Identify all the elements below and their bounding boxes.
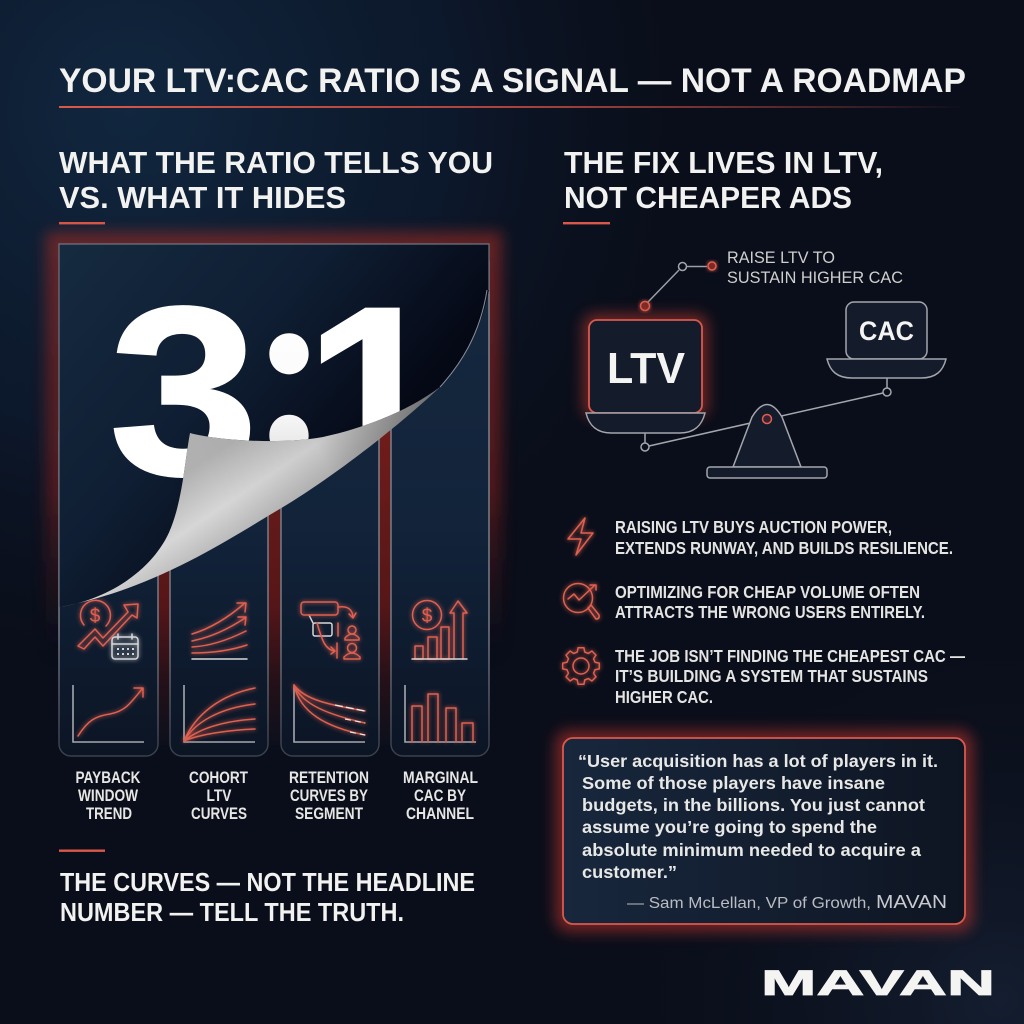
- icon: cohort rising lines: [192, 603, 247, 659]
- bullet 3: THE JOB ISN’T FINDING THE CHEAPEST CAC —: [615, 646, 965, 666]
- label: payback window trend: TREND: [86, 805, 132, 823]
- quote box: “User acquisition has a lot of players in it.: [578, 751, 938, 771]
- quote box: [555, 730, 973, 932]
- chart: retention curves by segment: [294, 685, 365, 742]
- quote box: Some of those players have insane: [582, 773, 885, 793]
- chart: marginal CAC by channel: [405, 685, 476, 742]
- label: cohort LTV curves: LTV: [206, 787, 232, 805]
- label: payback window trend: PAYBACK: [76, 769, 141, 787]
- bullet 1: [568, 517, 953, 558]
- label: retention curves by segment: [289, 769, 369, 823]
- bullet 3: [563, 646, 965, 707]
- icon: payback dollar and trend with calendar: [78, 600, 138, 659]
- icon: magnifier with trend: [564, 584, 599, 619]
- quote box: budgets, in the billions. You just cannot: [582, 795, 925, 815]
- bullet 3: HIGHER CAC.: [615, 687, 713, 707]
- icon: dollar, bars and up arrow: $: [422, 606, 433, 627]
- bullet 3: IT’S BUILDING A SYSTEM THAT SUSTAINS: [615, 666, 928, 686]
- bullet 1: RAISING LTV BUYS AUCTION POWER,: [615, 517, 892, 537]
- takeaway text: NUMBER — TELL THE TRUTH.: [60, 897, 404, 927]
- icon: dollar, bars and up arrow: [412, 600, 467, 659]
- chart: payback window trend: [73, 685, 144, 742]
- bullet 2: ATTRACTS THE WRONG USERS ENTIRELY.: [615, 602, 925, 622]
- fulcrum: [707, 404, 827, 478]
- bullet 2: [564, 582, 925, 622]
- CAC box: [846, 302, 927, 359]
- chart: cohort LTV curves: [184, 685, 255, 742]
- big number 3:1: 1: [305, 257, 445, 526]
- logo: MAVAN: [761, 964, 995, 1003]
- quote box: — Sam McLellan, VP of Growth,: [627, 895, 871, 912]
- label: cohort LTV curves: COHORT: [189, 769, 248, 787]
- takeaway text: [59, 850, 475, 927]
- title: YOUR LTV:CAC RATIO IS A SIGNAL — NOT A ROADMAP: [59, 62, 966, 100]
- bullet 2: OPTIMIZING FOR CHEAP VOLUME OFTEN: [615, 582, 920, 602]
- callout connector: [640, 262, 716, 310]
- heading: left column: [59, 145, 493, 224]
- label: retention curves by segment: SEGMENT: [295, 805, 363, 823]
- big number 3:1: 3: [109, 256, 259, 525]
- callout text: RAISE LTV TO: [727, 248, 835, 267]
- page curl: [60, 290, 487, 607]
- beam: [641, 378, 891, 451]
- bullet 1: EXTENDS RUNWAY, AND BUILDS RESILIENCE.: [615, 538, 953, 558]
- label: marginal CAC by channel: CAC BY: [414, 787, 466, 805]
- panel: ratio card with four columns: [46, 204, 502, 756]
- peeled sheet: [59, 244, 489, 607]
- icon: gear: [563, 648, 599, 684]
- icon: payback dollar and trend with calendar: $: [90, 606, 101, 627]
- LTV box: LTV: [607, 344, 686, 393]
- quote box: absolute minimum needed to acquire a: [582, 840, 921, 860]
- LTV box: [583, 314, 708, 418]
- heading: left column: VS. WHAT IT HIDES: [59, 180, 346, 215]
- column labels: [76, 769, 478, 823]
- big number 3:1: [114, 305, 400, 478]
- heading: right column: THE FIX LIVES IN LTV,: [564, 145, 883, 180]
- label: marginal CAC by channel: MARGINAL: [403, 769, 478, 787]
- label: payback window trend: WINDOW: [78, 787, 138, 805]
- label: retention curves by segment: CURVES BY: [290, 787, 368, 805]
- label: marginal CAC by channel: CHANNEL: [406, 805, 474, 823]
- heading: right column: [563, 145, 883, 224]
- quote box: customer.”: [582, 862, 677, 882]
- icon: segment flow with people: [301, 602, 360, 659]
- heading: right column: NOT CHEAPER ADS: [564, 180, 852, 215]
- quote box: assume you’re going to spend the: [582, 817, 877, 837]
- takeaway text: THE CURVES — NOT THE HEADLINE: [60, 867, 475, 897]
- icon: lightning bolt: [568, 518, 593, 555]
- left pan: [586, 413, 705, 433]
- label: marginal CAC by channel: [403, 769, 478, 823]
- right pan: [827, 359, 946, 378]
- label: payback window trend: [76, 769, 141, 823]
- callout text: [727, 248, 903, 287]
- balance scale: [583, 302, 946, 478]
- callout text: SUSTAIN HIGHER CAC: [727, 268, 903, 287]
- label: retention curves by segment: RETENTION: [289, 769, 369, 787]
- heading: left column: WHAT THE RATIO TELLS YOU: [59, 145, 493, 180]
- big number 3:1: :: [254, 204, 324, 515]
- quote box: MAVAN: [876, 892, 947, 912]
- label: cohort LTV curves: CURVES: [191, 805, 247, 823]
- CAC box: CAC: [859, 316, 914, 346]
- label: cohort LTV curves: [189, 769, 248, 823]
